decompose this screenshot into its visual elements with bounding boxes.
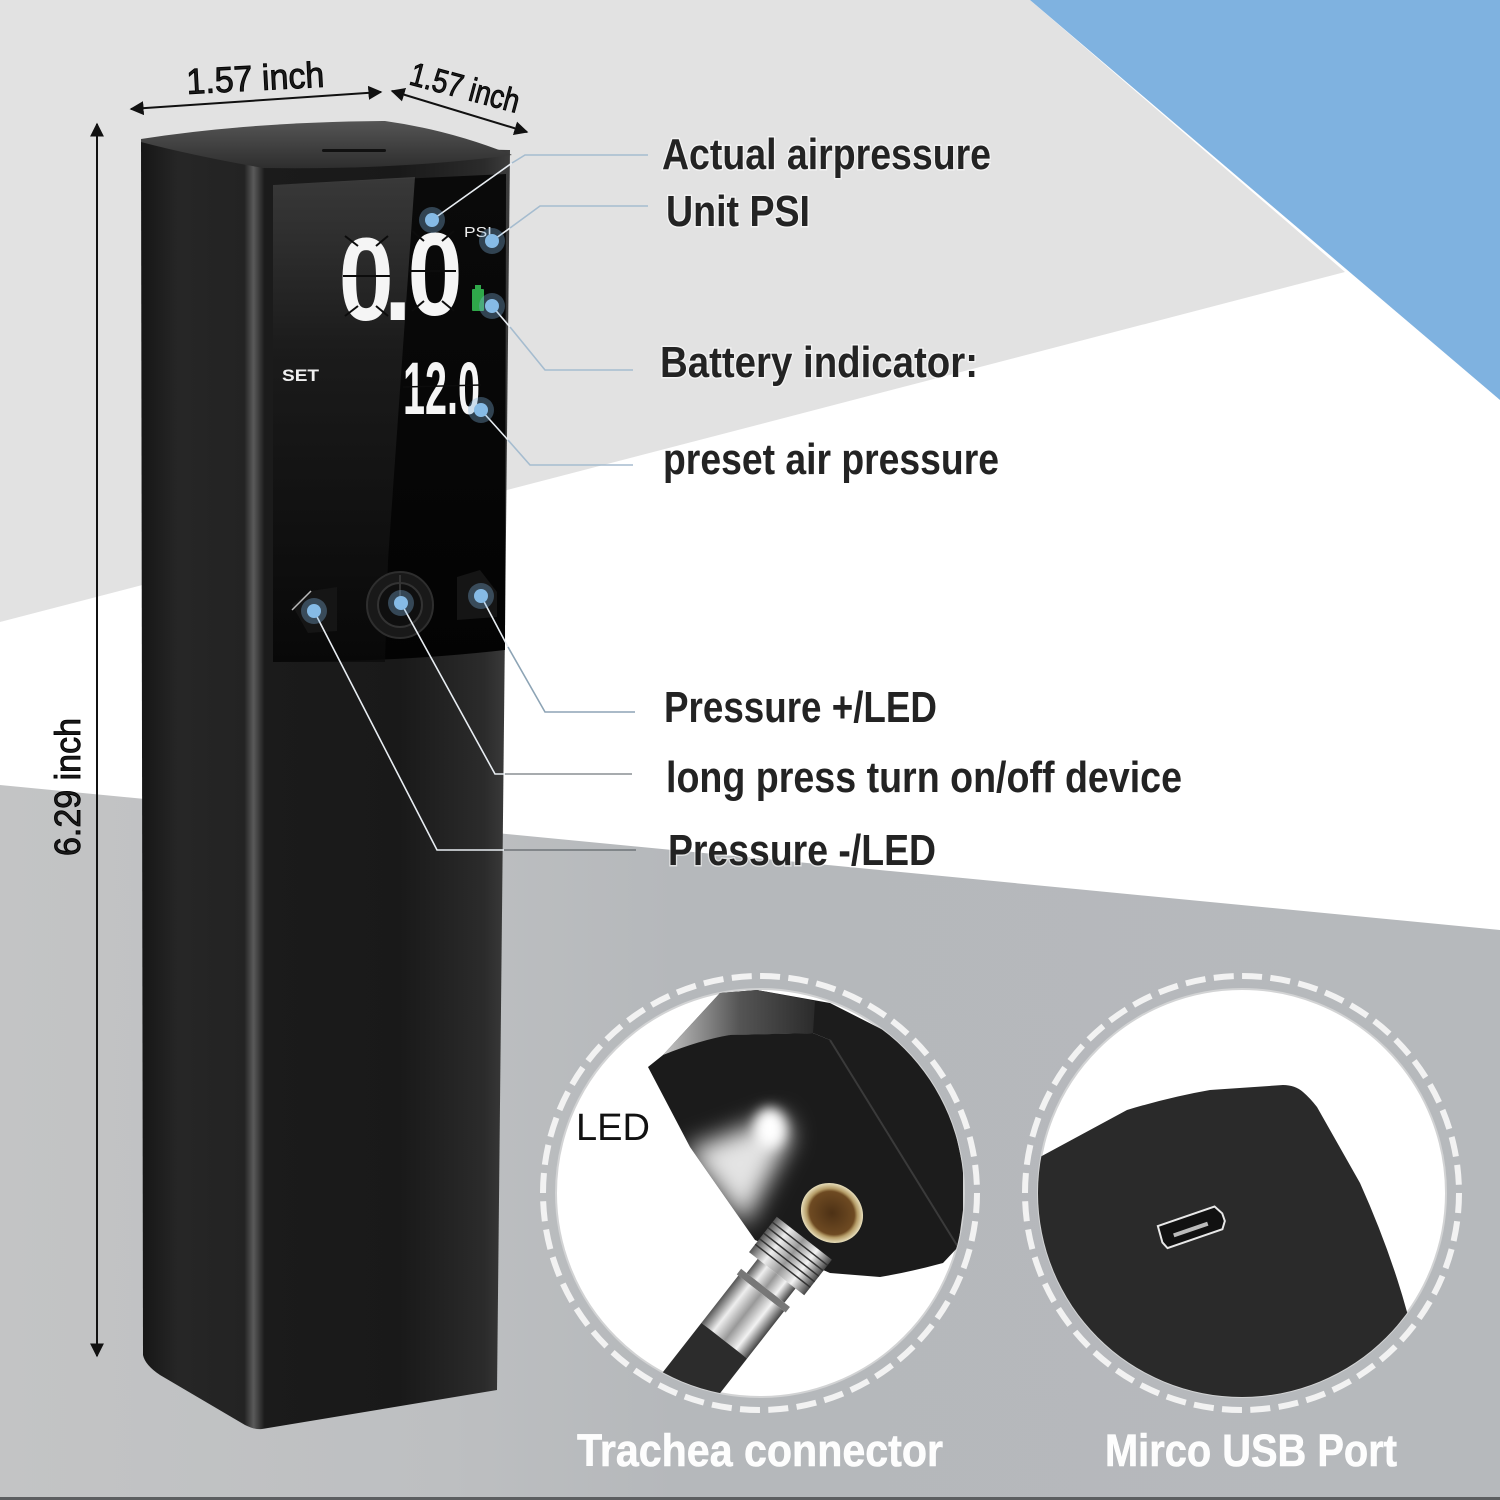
white disc [1038,989,1446,1397]
label: preset air pressure: preset air pressure [663,435,999,484]
main reading: 0 [408,209,463,341]
main reading: 0 [339,214,394,346]
leader: pressure plus [481,596,635,712]
label: pressure minus LED: Pressure -/LED [668,826,936,875]
label: pressure plus LED: Pressure +/LED [664,683,937,732]
leader: preset [481,410,633,465]
minus button [292,587,337,633]
unit label: PSI [464,224,492,241]
caption: trachea connector: Trachea connector [577,1425,943,1476]
label: battery indicator: Battery indicator: [660,338,978,387]
main reading: . [384,214,412,346]
label: power: long press turn on/off device [666,753,1182,802]
close-up of pump end [648,990,963,1393]
USB socket [1157,1205,1227,1249]
width dimension: front [131,54,381,109]
caption: micro USB port: Mirco USB Port [1105,1425,1397,1476]
inset: trachea connector and LED [543,976,977,1441]
leader: actual air pressure [432,155,648,220]
charging slit [322,149,386,152]
white disc [556,989,964,1397]
battery indicator icon [472,285,484,311]
glass reflection [273,177,415,662]
dashed ring [543,976,977,1410]
brass air inlet [800,1183,864,1243]
close-up of pump base [1038,1085,1408,1397]
power button [367,572,433,638]
leader: battery [492,306,633,370]
pump top cap [141,121,512,168]
preset reading [403,347,481,430]
width dimension: side: 1.57 inch [406,55,524,120]
leader: pressure minus [314,611,636,850]
pump casing [141,142,510,1429]
main reading [339,209,463,346]
product: air pump body [141,121,512,1429]
label: actual air pressure: Actual airpressure [662,130,991,179]
leader: unit PSI [492,206,648,241]
LED label: LED [576,1107,650,1149]
label: unit PSI: Unit PSI [666,187,810,236]
height dimension: 6.29 inch [47,718,88,856]
hose connector [662,1216,832,1393]
leader: power [401,603,632,774]
display panel [273,174,506,662]
dashed ring [1025,976,1459,1410]
plus button [457,570,497,620]
callout dots [301,207,505,624]
LED beam [685,1108,792,1225]
width dimension: front: 1.57 inch [185,54,325,102]
preset reading: 12.0 [403,347,480,430]
inset: micro USB port [1000,976,1460,1420]
set label: SET [282,366,320,385]
